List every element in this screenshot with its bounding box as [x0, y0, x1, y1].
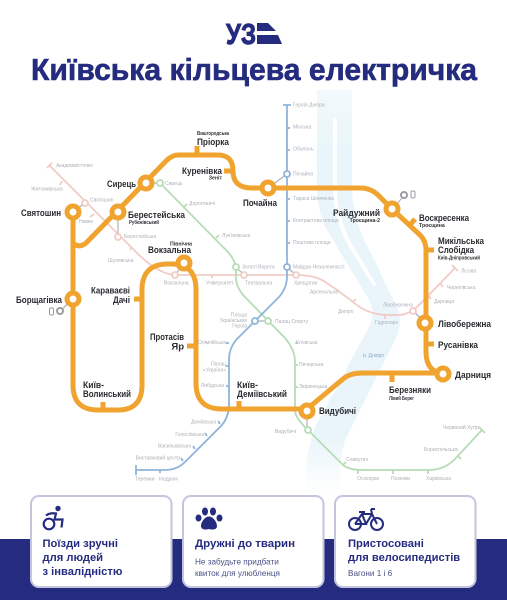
metro station labels: Почайна [293, 170, 313, 178]
metro station labels: Палац [211, 362, 226, 368]
metro station labels [31, 102, 479, 482]
orange line station labels: Воскресенка [419, 213, 470, 224]
metro station labels: Дарниця [434, 299, 454, 305]
metro station labels: Чернігівська [447, 285, 476, 291]
icon: paw [196, 508, 222, 530]
metro station labels: Героїв Дніпра [293, 102, 325, 108]
card text: з інвалідністю [42, 566, 123, 578]
orange line station labels: Троєщина-2 [350, 218, 380, 224]
metro station labels: Харківська [426, 476, 451, 482]
river Dnipro [306, 90, 400, 495]
metro station labels: Святошин [90, 198, 114, 204]
metro station labels: Сирець [165, 181, 183, 187]
metro station labels: Деміївська [191, 420, 216, 426]
orange line station labels: Сирець [107, 179, 136, 190]
orange line station labels: Північна [170, 242, 192, 248]
metro station labels: Виставковий центр [136, 454, 180, 462]
orange line station labels: Яр [171, 342, 184, 352]
metro station labels: Дніпро [338, 309, 354, 315]
icon: rail link near Borshchahivka [50, 308, 63, 315]
metro station labels: Мінська [293, 124, 311, 130]
metro station labels: Олімпійська [198, 339, 226, 346]
metro station labels: Золоті Ворота [242, 264, 275, 270]
orange line station labels: Берестейська [128, 210, 186, 221]
orange line station labels: Вишгородська [197, 131, 229, 137]
orange line station labels: Куренівка [182, 166, 223, 177]
orange line station labels: Райдужний [333, 208, 380, 219]
orange line station labels: Видубичі [319, 406, 356, 417]
metro station labels: Шулявська [108, 258, 134, 264]
metro station labels: Академмістечко [56, 163, 93, 169]
orange line station labels: Рубежівський [129, 219, 159, 226]
orange line station labels: Почайна [243, 198, 278, 209]
metro station labels: Площа [231, 312, 247, 318]
card text: Пристосовані [348, 538, 424, 550]
metro station labels: Берестейська [124, 233, 156, 240]
orange line station labels: Микільська [438, 236, 485, 247]
metro interchange rings [82, 171, 416, 433]
metro station labels: Героїв [232, 324, 247, 330]
metro line: red [47, 163, 458, 319]
metro station labels: Університет [206, 280, 234, 286]
metro station labels: Хрещатик [294, 280, 318, 286]
orange line station labels: Троєщина [419, 223, 445, 229]
metro station labels: Лівобережна [383, 302, 413, 308]
metro station labels: Кловська [296, 340, 318, 346]
metro station labels: Васильківська [158, 444, 191, 450]
icon: bicycle [349, 509, 383, 530]
orange line station labels: Дачі [113, 295, 130, 306]
card text: для велосипедистів [348, 552, 460, 564]
interchange connectors [60, 174, 426, 430]
metro station labels: Лісова [461, 268, 476, 274]
metro station labels: Позняки [391, 476, 410, 482]
metro station labels: Печерська [299, 362, 324, 368]
metro station labels: «Україна» [203, 368, 226, 374]
orange line station labels: Березняки [389, 385, 431, 396]
orange line station labels: Караваєві [91, 286, 130, 296]
card note: Не забудьте придбати [195, 558, 279, 566]
metro station labels: Майдан Незалежності [293, 264, 344, 270]
metro station labels: Театральна [245, 280, 272, 286]
orange line station labels: Київ-Дніпровський [438, 254, 480, 262]
metro station labels: Лук'янівська [222, 233, 251, 239]
orange ring line [73, 146, 444, 410]
metro line: green [160, 183, 485, 474]
metro station labels: Контрактова площа [293, 218, 339, 224]
river label: р. Дніпро [363, 353, 384, 359]
metro station labels: Нивки [79, 219, 93, 225]
metro station labels: Палац Спорту [275, 319, 308, 325]
card text: Поїзди зручні [42, 538, 118, 550]
card text: для людей [42, 552, 103, 564]
metro station labels: Теремки [135, 476, 155, 482]
orange line station labels: Пріорка [197, 137, 230, 148]
metro line: blue [136, 105, 291, 475]
icon: wheelchair [44, 506, 62, 529]
panel: accessibility [31, 496, 172, 587]
metro station labels: Либідська [201, 383, 224, 389]
metro station labels: Вокзальна [164, 280, 189, 286]
orange line station labels: Протасів [150, 332, 184, 343]
metro station labels: Іподром [159, 476, 178, 482]
orange line station labels: Київ- [237, 380, 258, 391]
orange line station labels: Київ- [83, 380, 104, 391]
metro station labels: Голосіївська [175, 432, 204, 438]
orange line station labels: Дарниця [455, 370, 491, 381]
orange line station labels: Русанівка [438, 340, 479, 351]
orange line station labels: Вокзальна [148, 245, 192, 256]
metro station labels: Гідропарк [375, 320, 399, 326]
metro station labels: Поштова площа [293, 240, 331, 246]
metro station labels: Українських [220, 318, 247, 324]
orange line station labels: Святошин [21, 208, 61, 219]
card note: Вагони 1 і 6 [348, 569, 393, 578]
orange line station labels: Слобідка [438, 245, 475, 256]
orange line station labels: Деміївський [237, 389, 287, 400]
title: Київська кільцева електричка [31, 52, 478, 87]
bottom band [0, 539, 507, 600]
metro station labels: Звіринецька [299, 384, 328, 390]
metro station labels: Бориспільська [424, 447, 458, 453]
icon: rail link near Raiduzhnyi [401, 191, 415, 198]
panel: pets [183, 496, 324, 587]
orange line station labels: Волинський [83, 389, 131, 400]
orange line station labels [16, 131, 492, 417]
metro station labels: Славутич [346, 457, 368, 463]
metro station labels: Тараса Шевченка [293, 196, 334, 202]
orange stations [67, 177, 449, 417]
metro station labels: Дорогожичі [189, 201, 215, 207]
metro station labels: Арсенальна [310, 290, 338, 296]
orange line station labels: Лівий Берег [389, 395, 415, 402]
orange line station labels: Лівобережна [438, 319, 492, 330]
logo: UZ [226, 19, 282, 51]
metro station labels: Оболонь [293, 146, 314, 152]
logo: UZ: УЗ [226, 19, 256, 51]
metro station labels: Видубичі [275, 429, 296, 435]
metro station labels: Житомирська [31, 186, 63, 192]
panel: cyclists [335, 496, 476, 587]
orange line station labels: Борщагівка [16, 295, 63, 306]
card note: квиток для улюбленця [195, 569, 280, 578]
orange line station labels: Зеніт [209, 176, 222, 182]
card text: Дружні до тварин [195, 538, 295, 550]
metro station labels: Червоний Хутір [443, 424, 479, 431]
metro station labels: Осокорки [357, 476, 379, 482]
